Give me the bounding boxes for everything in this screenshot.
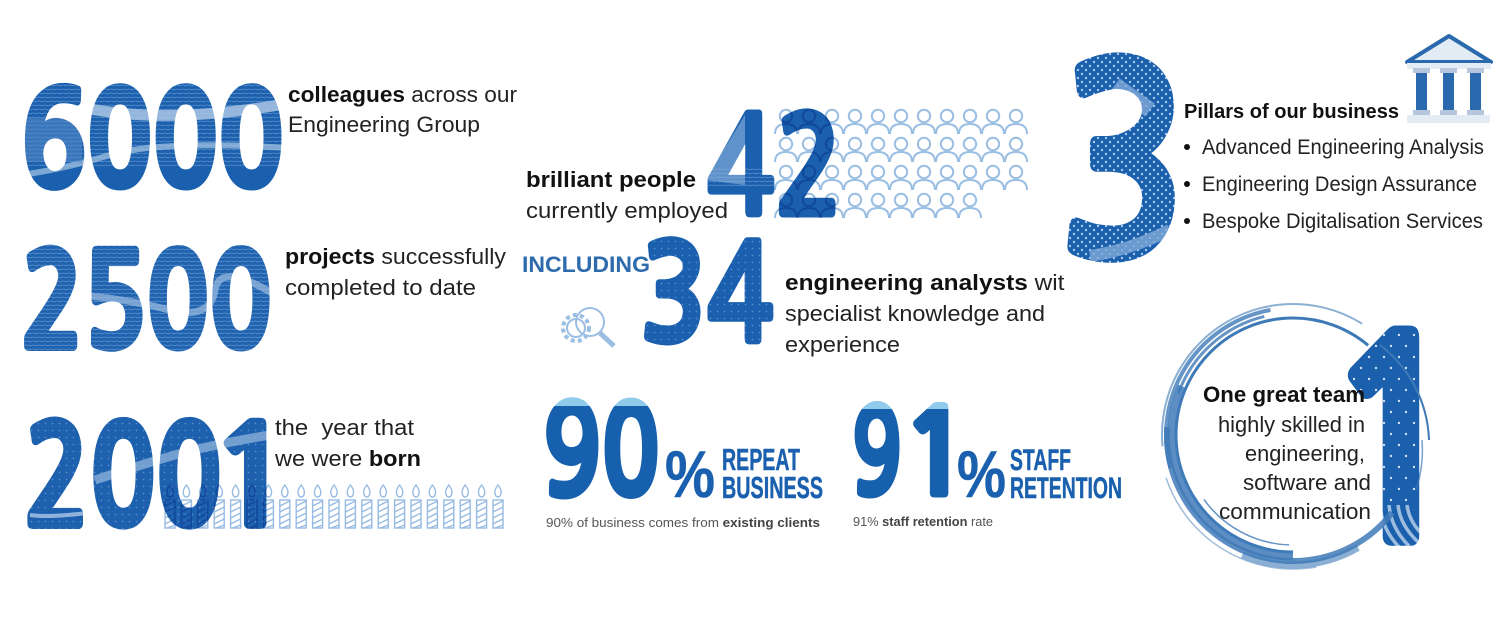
label: repeat business	[722, 442, 823, 505]
stat: 6000 colleagues	[21, 78, 517, 206]
text: one great team: engineering,	[1245, 441, 1365, 466]
text: projects: projects successfully	[285, 244, 506, 269]
label: repeat business: REPEAT	[722, 442, 800, 477]
ring: brush circle	[1115, 257, 1471, 613]
text: projects	[285, 244, 506, 300]
stat: 2500 projects	[21, 240, 506, 367]
number 2001: 1	[209, 411, 295, 546]
stat: 42 people	[526, 101, 1027, 234]
number 34: 34	[640, 229, 774, 361]
icon: grid of 42 people	[775, 110, 1027, 218]
number 2500: 2500	[21, 240, 272, 367]
text: one great team: communication	[1219, 499, 1371, 524]
text: brilliant people: brilliant people	[526, 167, 696, 192]
stat: 91% staff retention	[852, 395, 1122, 529]
label: repeat business: BUSINESS	[722, 470, 823, 505]
label: staff retention: RETENTION	[1010, 472, 1122, 505]
text: colleagues: colleagues across our	[288, 82, 517, 107]
caption: 90%: 90% of business comes from existing clients	[546, 516, 820, 530]
text: engineering analysts: specialist knowledge and	[785, 301, 1045, 326]
list: three pillars: Bespoke Digitalisation Services	[1202, 210, 1483, 233]
stat: 90% repeat business	[543, 392, 823, 530]
text: year born	[274, 415, 421, 471]
text: year born: the year that	[275, 415, 414, 440]
text: one great team: highly skilled in	[1218, 412, 1365, 437]
number 2001: 200	[24, 411, 222, 546]
stat: 2001 founding year	[24, 411, 503, 546]
list: three pillars: Advanced Engineering Analysis	[1202, 136, 1484, 159]
stat: 34 engineering analysts	[524, 236, 1064, 356]
caption: 91%: 91% staff retention rate	[853, 515, 993, 529]
text: engineering analysts	[785, 270, 1078, 357]
number 1: 1	[1322, 309, 1469, 580]
text: projects: completed to date	[285, 275, 476, 300]
label: staff retention: STAFF	[1010, 444, 1071, 477]
icon: row of birthday candles	[165, 485, 503, 528]
number 91: 1	[901, 395, 972, 512]
number 91: 9	[852, 395, 902, 512]
heading: pillars: Pillars of our business	[1184, 101, 1399, 123]
text: one great team: One great team	[1203, 382, 1365, 407]
heading: including: INCLUDING	[522, 252, 650, 277]
list: three pillars	[1184, 136, 1484, 233]
percent sign: %	[665, 437, 715, 511]
number 3: 3	[1059, 39, 1188, 294]
stat: 3 pillars	[1059, 36, 1491, 294]
number 6000: 6000	[21, 78, 284, 206]
number 90: 90	[543, 392, 660, 514]
text: engineering analysts: engineering analysts with	[785, 270, 1078, 295]
text: colleagues: Engineering Group	[288, 112, 480, 137]
list: three pillars: Engineering Design Assurance	[1202, 173, 1477, 196]
icon: gear and magnifier	[563, 308, 614, 346]
label: staff retention	[1010, 444, 1122, 505]
stat: one great team	[1115, 257, 1471, 613]
text: year born: we were born	[274, 446, 421, 471]
percent sign: %	[957, 437, 1006, 511]
text: one great team	[1203, 382, 1371, 524]
text: colleagues	[288, 82, 517, 137]
icon: pillared building	[1407, 36, 1491, 123]
text: brilliant people	[526, 167, 728, 223]
text: one great team: software and	[1243, 470, 1371, 495]
number 42: 42	[707, 101, 843, 234]
text: engineering analysts: experience	[785, 332, 900, 357]
text: brilliant people: currently employed	[526, 198, 728, 223]
